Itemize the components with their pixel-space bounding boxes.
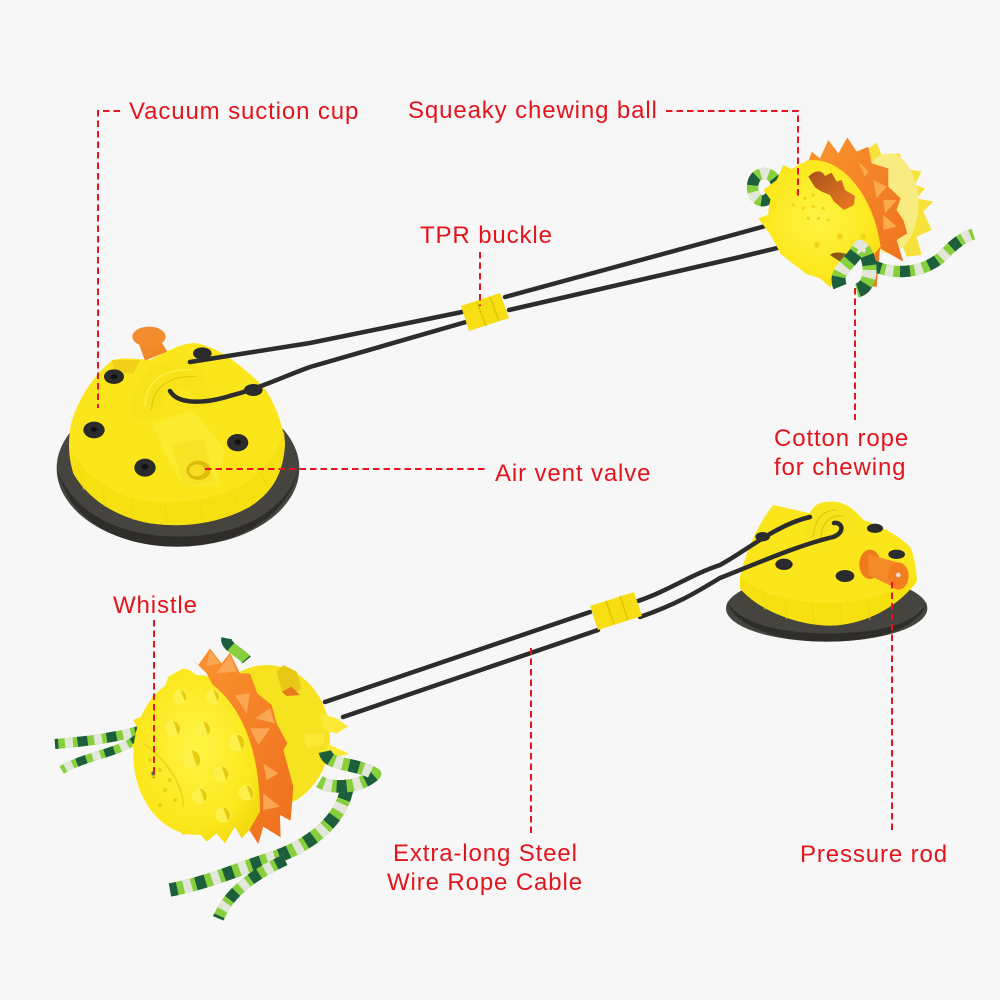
TPR buckle: upper	[461, 293, 509, 331]
toy 1: upper suction cup base	[57, 327, 299, 547]
label: Extra-long Steel Wire Rope Cable: Wire Rope Cable	[387, 869, 583, 896]
label: Squeaky chewing ball	[408, 97, 798, 197]
pressure rod	[859, 550, 909, 590]
label: Cotton rope for chewing	[774, 288, 909, 481]
label: Vacuum suction cup	[98, 98, 359, 408]
label: Pressure rod: Pressure rod	[800, 841, 948, 868]
label: Cotton rope for chewing: Cotton rope	[774, 425, 909, 452]
label: Vacuum suction cup: Vacuum suction cup	[129, 98, 359, 125]
label: Whistle: Whistle	[113, 592, 198, 619]
chewing slot	[808, 171, 855, 210]
front ball body with spikes	[132, 668, 260, 843]
rope: left loop	[753, 173, 777, 201]
cable: upper steel wire	[170, 222, 798, 402]
label: Extra-long Steel Wire Rope Cable	[387, 648, 583, 896]
label: Air vent valve: Air vent valve	[495, 460, 651, 487]
rear half	[203, 665, 330, 808]
rope: knot	[319, 752, 375, 786]
orange band	[189, 648, 293, 844]
rope: top loop	[227, 638, 247, 660]
label: Squeaky chewing ball: Squeaky chewing ball	[408, 97, 658, 124]
cable: lower steel wire	[325, 517, 841, 717]
ball spikes	[165, 689, 255, 823]
label: Extra-long Steel Wire Rope Cable: Extra-long Steel	[393, 840, 578, 867]
TPR buckle: lower	[590, 592, 642, 630]
toy 2: lower suction cup base	[726, 502, 927, 642]
rope: left tail	[55, 729, 145, 744]
label: TPR buckle	[420, 222, 553, 306]
rope: long tail	[170, 790, 347, 890]
valve	[186, 461, 210, 480]
rope: chew tail	[872, 234, 973, 272]
toy 2: spiked ball with rope	[55, 638, 375, 918]
rope: knot	[839, 247, 870, 291]
pressure rod	[132, 327, 167, 361]
label: TPR buckle: TPR buckle	[420, 222, 553, 249]
toy 1: squeaky ball with rope	[753, 137, 973, 291]
label: Cotton rope for chewing: for chewing	[774, 454, 906, 481]
whistle hole	[151, 771, 155, 775]
